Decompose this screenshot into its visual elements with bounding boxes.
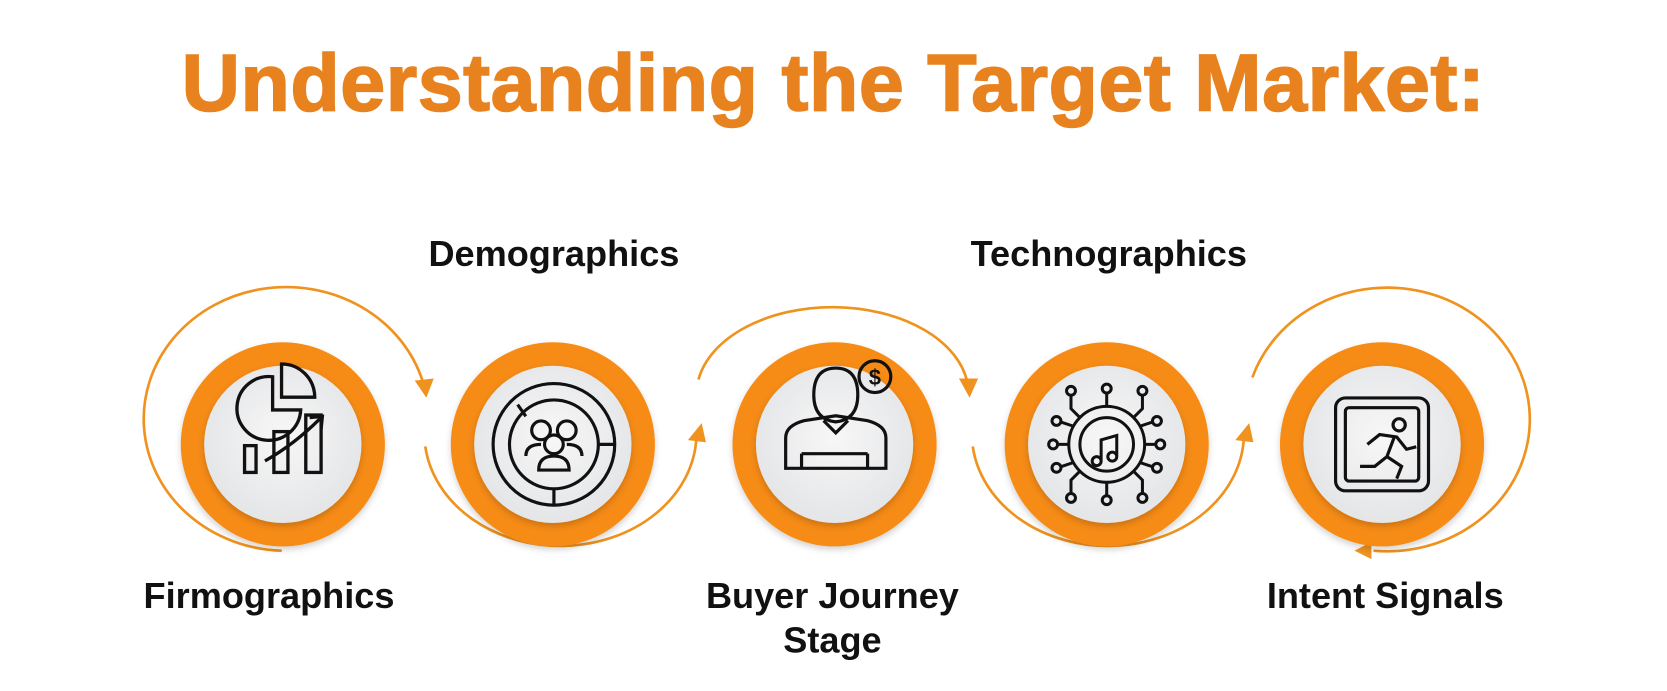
circle: firmographics xyxy=(181,342,385,546)
label: technographics: Technographics xyxy=(971,233,1247,274)
label: buyer journey stage: Stage xyxy=(783,620,882,661)
label: intent signals: Intent Signals xyxy=(1267,575,1504,616)
icon: buyer with dollar xyxy=(786,361,891,468)
icon: music hub xyxy=(1049,384,1165,505)
arcs connecting circles xyxy=(144,287,1530,551)
label: demographics: Demographics xyxy=(428,233,679,274)
icon: chart xyxy=(237,364,322,472)
icon: group in target xyxy=(493,384,615,505)
circle: technographics xyxy=(1005,342,1209,546)
arrowheads xyxy=(415,378,1371,559)
circle: intent signals xyxy=(1280,342,1484,546)
circle: demographics xyxy=(451,342,655,546)
circle: buyer journey xyxy=(733,342,937,546)
icon: running exit sign xyxy=(1336,398,1429,491)
icon: buyer with dollar: $ xyxy=(869,365,881,390)
label: buyer journey stage: Buyer Journey xyxy=(706,575,959,616)
labels xyxy=(144,233,1504,661)
title: Understanding the Target Market: xyxy=(182,39,1485,129)
label: firmographics: Firmographics xyxy=(144,575,394,616)
